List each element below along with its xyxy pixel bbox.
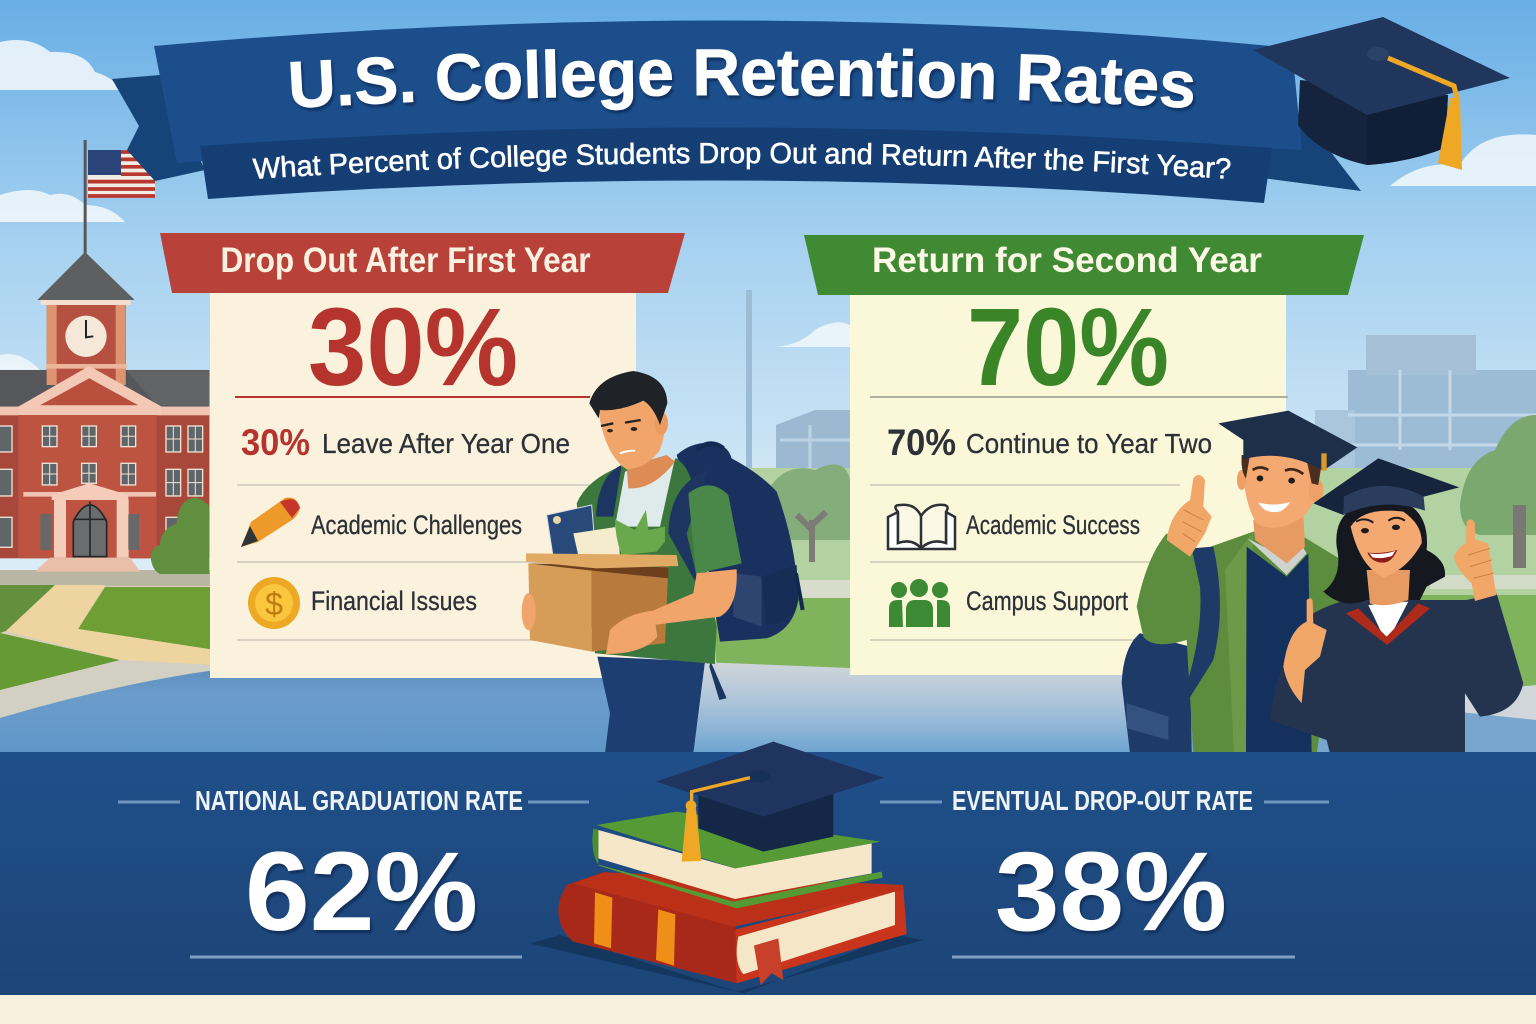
paper (573, 527, 620, 560)
title: U.S. College Retention Rates (290, 48, 1196, 114)
row: leave after year one: Leave After Year One (322, 428, 570, 459)
clock tower (37, 252, 135, 300)
row: campus support: Campus Support (966, 586, 1128, 616)
banner tails (112, 75, 1361, 191)
panel: drop out after first year (160, 233, 685, 678)
icon: coin: $ (265, 586, 283, 622)
illustration: two graduates (1122, 411, 1523, 753)
pediment (18, 366, 162, 415)
icon: people (889, 579, 950, 627)
collar (1368, 602, 1408, 643)
stat: national graduation rate (118, 785, 589, 957)
plant (615, 510, 665, 555)
drop out header (160, 233, 685, 293)
shirt (577, 458, 717, 664)
male cap (1218, 411, 1357, 471)
icon: american flag (88, 150, 155, 198)
jeans (597, 657, 705, 753)
row: continue to year two: Continue to Year Two (966, 428, 1212, 459)
tablet (547, 505, 596, 558)
male graduate jacket (1137, 532, 1342, 753)
illustration: books and cap (530, 742, 923, 993)
neck (627, 455, 675, 488)
male neck and head (1253, 513, 1305, 563)
icon: pencil (241, 497, 300, 547)
shrub (151, 498, 209, 574)
row: continue to year two (887, 422, 1212, 463)
row: academic success: Academic Success (966, 510, 1140, 540)
trees (768, 415, 1536, 568)
portico (23, 492, 156, 497)
row: leave after year one (241, 422, 570, 463)
icon: open book (888, 505, 955, 549)
row: academic success (888, 505, 1140, 549)
drop out header: Drop Out After First Year (220, 241, 591, 280)
row: leave after year one: 30% (241, 422, 310, 463)
clouds (0, 40, 1536, 370)
windows (0, 426, 203, 547)
cream footer strip (0, 995, 1536, 1024)
bottom band (0, 752, 1536, 995)
return header: Return for Second Year (872, 241, 1262, 280)
straps (596, 465, 622, 517)
stat: eventual drop-out rate: EVENTUAL DROP-OUT RATE (952, 785, 1253, 816)
backpack (677, 443, 798, 642)
female cap (1343, 484, 1425, 515)
cap (698, 792, 833, 852)
steps (35, 558, 140, 572)
distant buildings (746, 290, 1536, 480)
bookmark (754, 938, 783, 985)
female hair (1323, 502, 1445, 604)
road and lawn foreground (650, 660, 1150, 752)
background: sky and campus (0, 0, 1536, 760)
stat: eventual drop-out rate: 38% (995, 829, 1227, 954)
stat: eventual drop-out rate (880, 785, 1329, 957)
subtitle ribbon (200, 128, 1272, 203)
sleeve (688, 485, 742, 574)
row: campus support (889, 579, 1128, 627)
row: continue to year two: 70% (887, 422, 956, 463)
backpack (1122, 633, 1192, 753)
female gown (1270, 593, 1523, 753)
stat: national graduation rate: 62% (245, 829, 478, 954)
male hand (1167, 475, 1212, 557)
box (528, 563, 592, 652)
subtitle: What Percent of College Students Drop Out and Return After the First Year? (252, 142, 1230, 179)
arm and hands (647, 569, 737, 625)
female neck and face (1367, 570, 1410, 605)
panel: return for second year (804, 235, 1364, 675)
row: financial issues: Financial Issues (311, 586, 477, 616)
red book (733, 887, 907, 983)
30 percent stat: 30% (308, 286, 518, 409)
row: academic challenges: Academic Challenges (311, 510, 522, 540)
70 percent stat: 70% (967, 286, 1169, 409)
female hands (1283, 598, 1327, 703)
stat: national graduation rate: NATIONAL GRADUATION RATE (195, 785, 523, 816)
icon: coin (248, 577, 300, 629)
row: financial issues (248, 577, 477, 629)
ground (716, 468, 1536, 600)
return header (804, 235, 1364, 295)
illustration: student leaving with box (522, 371, 803, 753)
school building with clock tower (0, 140, 209, 574)
icon: graduation cap top right (1253, 17, 1510, 170)
row: academic challenges (241, 497, 522, 547)
title banner (154, 20, 1302, 163)
flagpole (84, 140, 87, 253)
green book (598, 865, 883, 908)
shadow (530, 935, 923, 993)
head (599, 390, 665, 469)
